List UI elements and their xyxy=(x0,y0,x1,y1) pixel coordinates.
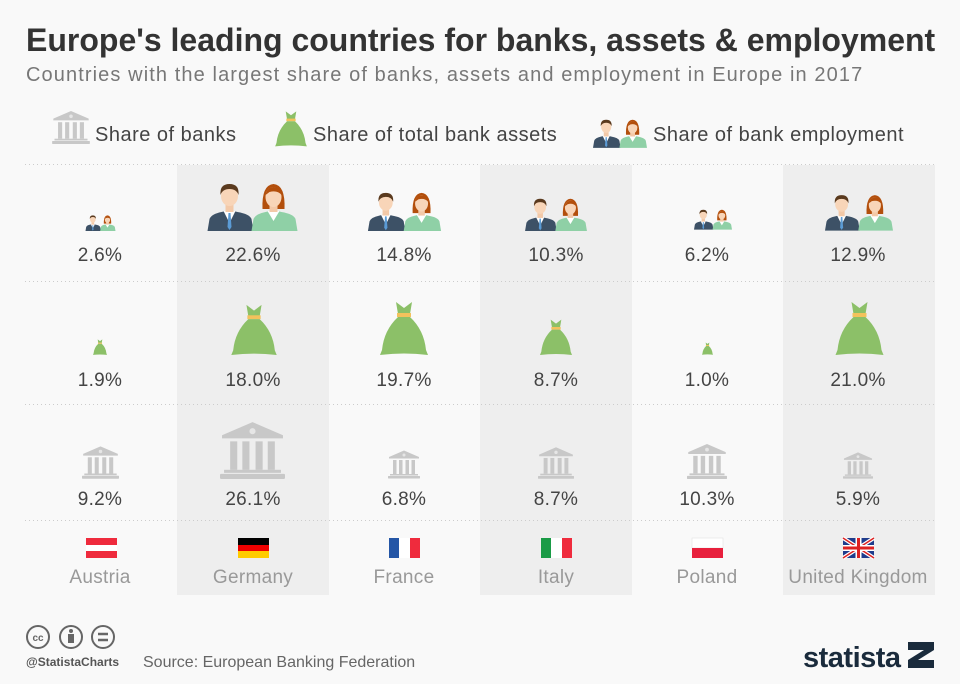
employment row: 6.2% xyxy=(685,245,729,266)
subtitle: Countries with the largest share of banks, assets and employment in Europe in 2017 xyxy=(26,64,863,86)
assets row xyxy=(78,302,886,391)
country flags and names: Italy xyxy=(538,567,574,588)
footer text: @StatistaCharts xyxy=(26,655,119,669)
banks row: 6.8% xyxy=(382,489,426,510)
assets row: 1.0% xyxy=(685,370,729,391)
employment row: 14.8% xyxy=(376,245,432,266)
statista logo: statista xyxy=(803,642,902,674)
employment row: 10.3% xyxy=(528,245,584,266)
shaded columns xyxy=(177,165,935,595)
banks row: 26.1% xyxy=(225,489,281,510)
country flags and names: France xyxy=(374,567,434,588)
employment row: 22.6% xyxy=(225,245,281,266)
assets row: 19.7% xyxy=(376,370,432,391)
banks row xyxy=(78,422,880,510)
employment row: 2.6% xyxy=(78,245,122,266)
title: Europe's leading countries for banks, assets & employment xyxy=(26,22,935,58)
assets row: 8.7% xyxy=(534,370,578,391)
country flags and names: Austria xyxy=(69,567,131,588)
legend: employment icon xyxy=(593,120,647,148)
employment row xyxy=(78,184,893,266)
banks row: 8.7% xyxy=(534,489,578,510)
legend xyxy=(52,111,904,148)
legend: assets icon xyxy=(275,111,307,146)
cc icons xyxy=(27,626,114,648)
assets row: 21.0% xyxy=(830,370,886,391)
banks row: 9.2% xyxy=(78,489,122,510)
country flags and names: Germany xyxy=(213,567,293,588)
legend: Share of total bank assets xyxy=(313,124,557,146)
cc icons: cc xyxy=(32,633,44,644)
banks row: 5.9% xyxy=(836,489,880,510)
country flags and names xyxy=(69,538,928,588)
legend: Share of banks xyxy=(95,124,237,146)
legend: Share of bank employment xyxy=(653,124,904,146)
country flags and names: United Kingdom xyxy=(788,567,928,588)
country flags and names: Poland xyxy=(677,567,737,588)
assets row: 18.0% xyxy=(225,370,281,391)
text: Source: European Banking Federation xyxy=(143,654,415,671)
legend: banks icon xyxy=(52,111,90,144)
assets row: 1.9% xyxy=(78,370,122,391)
employment row: 12.9% xyxy=(830,245,886,266)
banks row: 10.3% xyxy=(679,489,735,510)
